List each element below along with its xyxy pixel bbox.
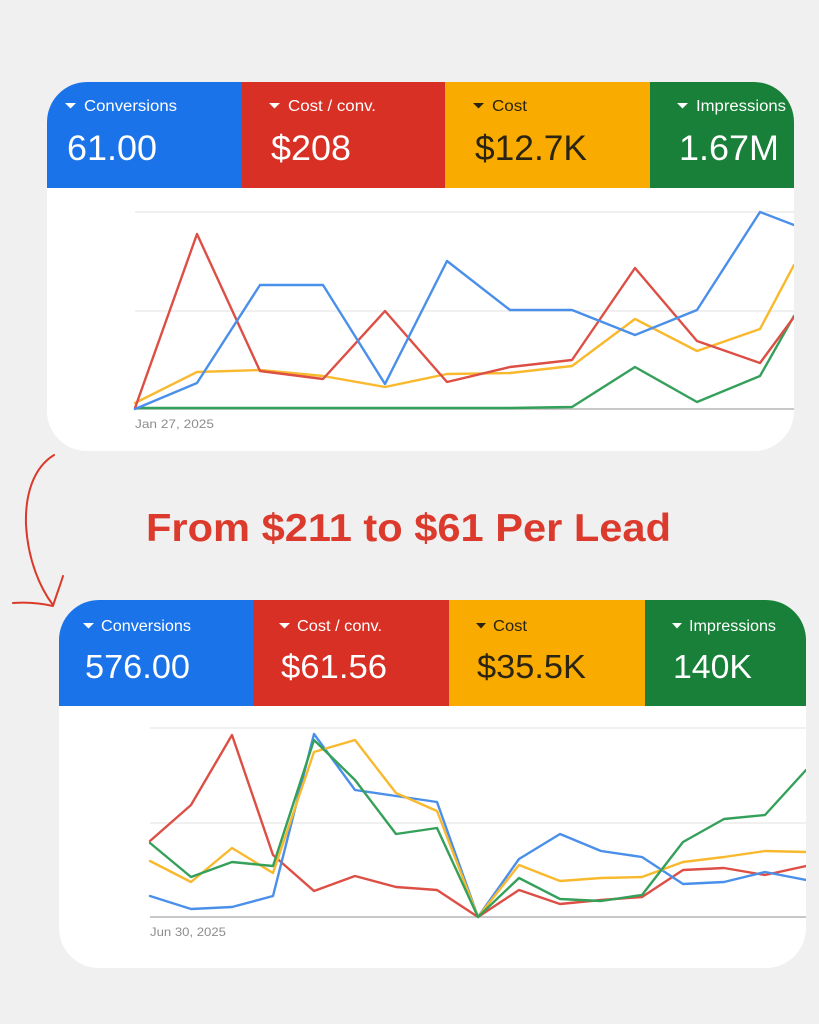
metric tab: Impressions: 140K: [673, 648, 752, 685]
panel: before dashboard (Jan 2025): [47, 82, 794, 451]
date label: Jan 27, 2025: Jan 27, 2025: [135, 417, 214, 431]
metric tab: Cost: Cost: [492, 98, 528, 115]
metric tab: Impressions: [650, 82, 794, 188]
metric tab: Cost: [449, 600, 645, 706]
metric tab: Conversions: Conversions: [101, 618, 191, 635]
line chart: after period: [150, 728, 806, 917]
metric tab: Conversions: 576.00: [85, 648, 190, 685]
metric tab: Conversions: Conversions: [84, 98, 177, 115]
metric tab: Cost per conversion: $61.56: [281, 648, 387, 685]
metric tab: Cost: [445, 82, 650, 188]
metric tab: Impressions: Impressions: [689, 618, 776, 635]
heading: From $211 to $61 Per Lead: [146, 507, 671, 550]
metric tab: Cost: Cost: [493, 618, 528, 635]
panel: after dashboard (Jun 2025): [59, 600, 806, 968]
metric tab: Cost: $35.5K: [477, 648, 586, 685]
line chart: before period: [135, 212, 794, 409]
metric tab: Impressions: 1.67M: [679, 129, 779, 168]
metric tab: Cost per conversion: $208: [271, 129, 351, 168]
metric tab: Impressions: [645, 600, 806, 706]
arrow: from before to after: [13, 455, 63, 606]
metric tab: Impressions: Impressions: [696, 98, 786, 115]
metric tab: Cost per conversion: [253, 600, 449, 706]
metric tab: Cost per conversion: Cost / conv.: [297, 618, 382, 635]
metric tab: Conversions: [47, 82, 242, 188]
metric tab: Conversions: [59, 600, 253, 706]
metric tab: Conversions: 61.00: [67, 129, 157, 168]
metric tab: Cost per conversion: Cost / conv.: [288, 98, 376, 115]
date label: Jun 30, 2025: Jun 30, 2025: [150, 925, 226, 939]
metric tab: Cost: $12.7K: [475, 129, 587, 168]
metric tab: Cost per conversion: [242, 82, 445, 188]
